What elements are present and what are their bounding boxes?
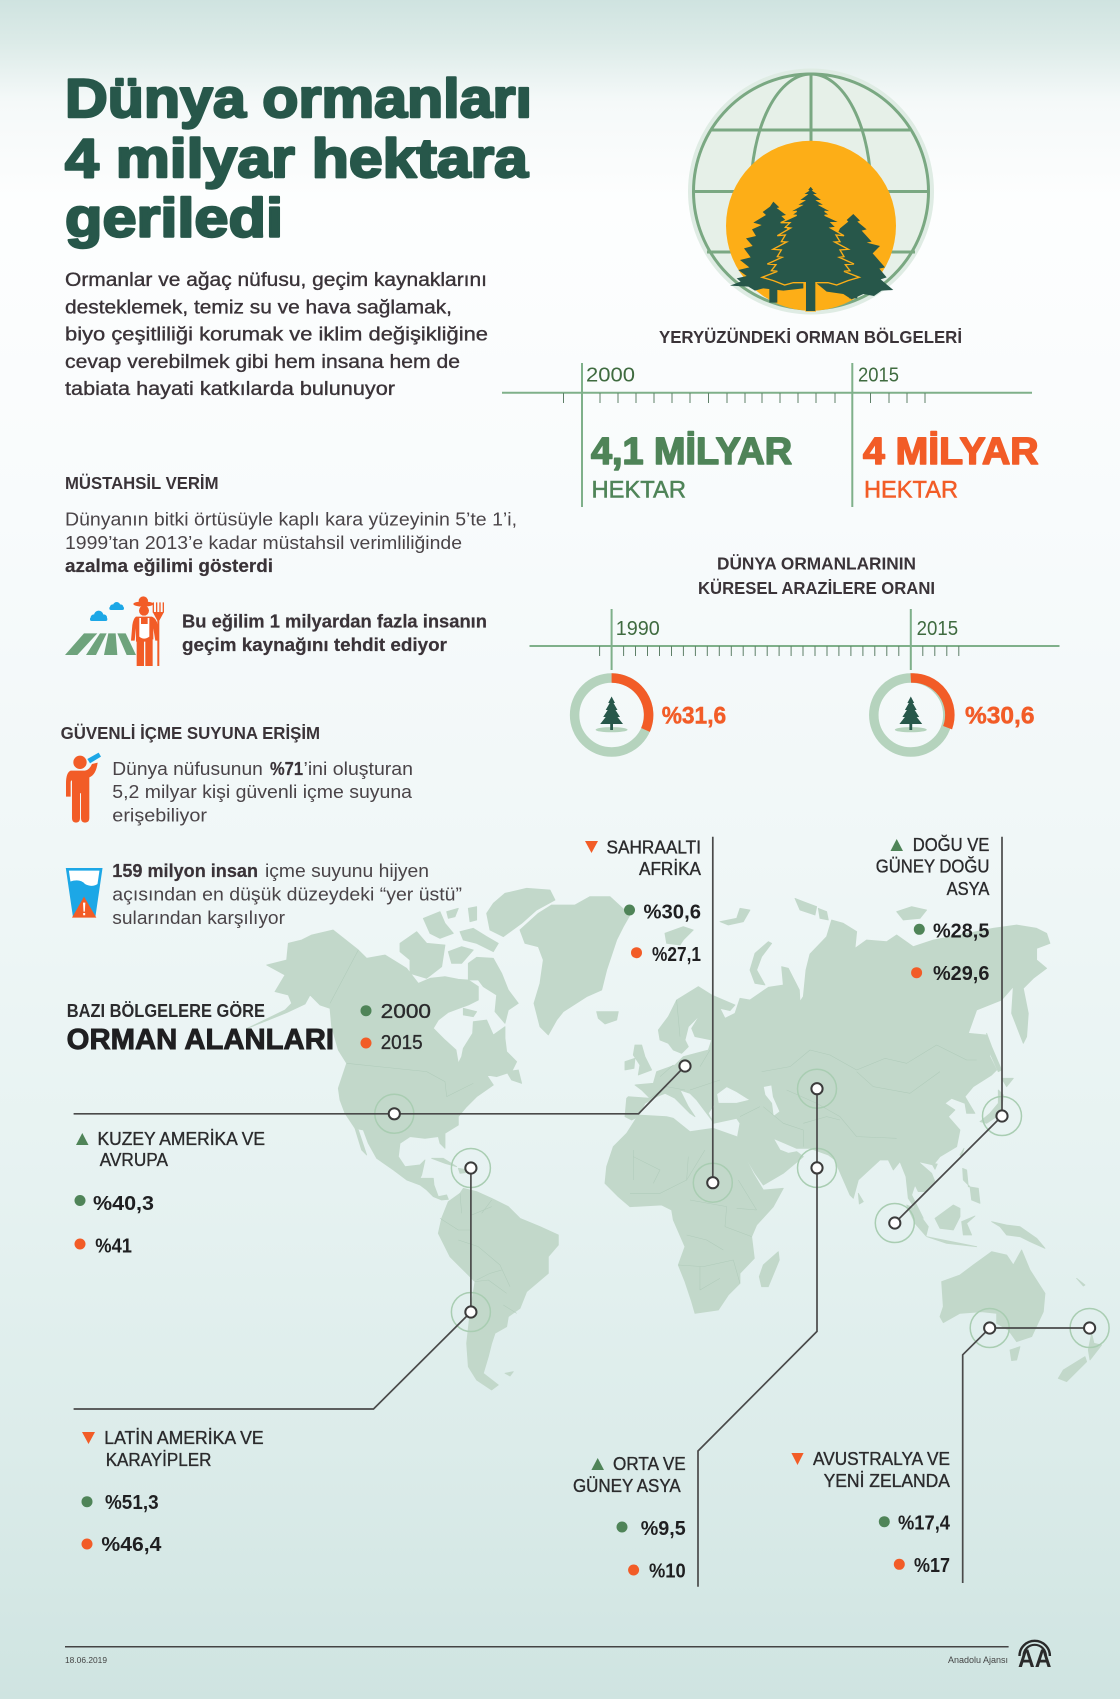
callout: threat to livelihoods: [182, 612, 487, 655]
region: Sub-Saharan Africa: AFRİKA: [639, 859, 701, 879]
intro paragraph: cevap verebilmek gibi hem insana hem de: [65, 352, 460, 373]
map heading: BAZI BÖLGELERE GÖRE: [67, 1001, 265, 1021]
region: Australia and New Zealand: AVUSTRALYA VE: [813, 1449, 950, 1469]
connector markers: [389, 1060, 1095, 1334]
stat: 2015 forest area: HEKTAR: [864, 477, 958, 504]
section: productive yield: Dünyanın bitki örtüsüyle kaplı kara yüzeyinin 5’te 1’i,: [65, 510, 517, 530]
region: East and Southeast Asia: %29,6: [933, 962, 989, 985]
region: Latin America and Caribbean: %46,4: [101, 1533, 162, 1556]
map heading: [67, 1001, 334, 1056]
eurasia: [625, 898, 1050, 1218]
timeline 2000-2015: 2015: [858, 364, 899, 387]
footer: Anadolu Ajansı: [948, 1655, 1008, 1665]
region: Sub-Saharan Africa: SAHRAALTI: [606, 837, 701, 857]
oceania and southeast asia: [858, 1148, 1102, 1382]
north america and greenland: [247, 888, 693, 1200]
text: 159 million people: sularından karşılıyor: [112, 908, 285, 928]
heading: forest share of land: DÜNYA ORMANLARININ: [717, 553, 916, 573]
region: Central and South Asia: %9,5: [641, 1517, 686, 1540]
timeline 1990-2015: 1990: [616, 617, 660, 640]
donut chart: 1990: %31,6: [662, 702, 726, 729]
region: North America and Europe: AVRUPA: [100, 1150, 168, 1170]
timeline 1990-2015: [530, 609, 1060, 670]
connector rings: [375, 1069, 1109, 1348]
region: North America and Europe: KUZEY AMERİKA VE: [98, 1129, 265, 1149]
text: 71 percent have access: erişebiliyor: [112, 806, 207, 826]
footer: 18.06.2019: [65, 1655, 107, 1665]
region: Central and South Asia: GÜNEY ASYA: [573, 1476, 681, 1496]
donut chart: 1990: [575, 678, 726, 752]
south america: [432, 1158, 558, 1390]
legend: [360, 1001, 431, 1054]
region: Latin America and Caribbean: LATİN AMERİKA VE: [104, 1428, 264, 1448]
intro paragraph: tabiata hayati katkılarda bulunuyor: [65, 379, 396, 400]
text: 71 percent have access: %71: [270, 759, 303, 779]
text: 159 million people: 159 milyon insan: [112, 861, 258, 881]
text: 71 percent have access: [112, 759, 413, 826]
heading: forest regions: YERYÜZÜNDEKİ ORMAN BÖLGELERİ: [659, 327, 962, 347]
section: productive yield: [65, 473, 517, 576]
stat: 2015 forest area: 4 MİLYAR: [863, 431, 1038, 473]
region: Sub-Saharan Africa: [585, 837, 701, 966]
icon: Anadolu Agency logo: AA: [1018, 1645, 1051, 1673]
timeline 2000-2015: [502, 363, 1032, 507]
region: Latin America and Caribbean: [82, 1428, 264, 1556]
timeline 2000-2015: 2000: [586, 364, 635, 387]
donut chart: 2015: [874, 678, 1034, 752]
stat: 2015 forest area: [863, 431, 1038, 504]
intro paragraph: biyo çeşitliliği korumak ve iklim değişikliğine: [65, 324, 488, 346]
region: Central and South Asia: [573, 1454, 686, 1582]
icon: farmer and field: [65, 596, 164, 666]
legend: 2015: [381, 1032, 423, 1054]
icon: glass with warning: [66, 868, 102, 918]
region: East and Southeast Asia: %28,5: [933, 919, 989, 942]
text: 159 million people: açısından en düşük düzeydeki “yer üstü”: [112, 885, 462, 905]
title: 4 milyar hektara: [65, 127, 528, 189]
title: geriledi: [65, 186, 283, 248]
world map: [247, 888, 1102, 1390]
icon: globe with trees: [688, 68, 934, 314]
intro paragraph: desteklemek, temiz su ve hava sağlamak,: [65, 298, 452, 318]
region: Central and South Asia: ORTA VE: [613, 1454, 686, 1474]
intro paragraph: [65, 270, 488, 400]
title: [65, 67, 532, 248]
region: East and Southeast Asia: [876, 834, 989, 985]
connector lines: [74, 837, 1090, 1587]
title: Dünya ormanları: [65, 67, 532, 129]
region: Australia and New Zealand: %17,4: [898, 1512, 951, 1535]
section: productive yield: 1999’tan 2013’e kadar müstahsil verimliliğinde: [65, 533, 462, 553]
text: 159 million people: [112, 861, 462, 928]
text: 71 percent have access: Dünya nüfusunun: [112, 759, 263, 779]
region: East and Southeast Asia: ASYA: [947, 879, 989, 899]
callout: threat to livelihoods: Bu eğilim 1 milyardan fazla insanın: [182, 612, 487, 632]
map heading: ORMAN ALANLARI: [67, 1024, 334, 1056]
footer: [65, 1647, 1009, 1665]
heading: forest share of land: [698, 553, 935, 598]
donut chart: 2015: %30,6: [965, 702, 1034, 729]
section heading: safe drinking water: GÜVENLİ İÇME SUYUNA ERİŞİM: [61, 723, 320, 743]
region: Central and South Asia: %10: [649, 1559, 686, 1582]
text: 71 percent have access: 5,2 milyar kişi güvenli içme suyuna: [112, 782, 413, 802]
region: Sub-Saharan Africa: %27,1: [652, 943, 701, 966]
region: East and Southeast Asia: DOĞU VE: [913, 834, 989, 855]
section: productive yield: MÜSTAHSİL VERİM: [65, 473, 218, 493]
region: Latin America and Caribbean: %51,3: [105, 1491, 159, 1514]
stat: 2000 forest area: 4,1 MİLYAR: [591, 431, 792, 473]
legend: 2000: [381, 1001, 431, 1023]
icon: person drinking: [66, 753, 101, 823]
africa: [605, 1115, 783, 1313]
region: Australia and New Zealand: %17: [914, 1554, 950, 1577]
text: 71 percent have access: ’ini oluşturan: [304, 759, 413, 779]
region: Australia and New Zealand: [791, 1449, 951, 1577]
timeline 1990-2015: 2015: [917, 617, 958, 640]
region: Sub-Saharan Africa: %30,6: [644, 900, 701, 923]
intro paragraph: Ormanlar ve ağaç nüfusu, geçim kaynaklarını: [65, 270, 487, 291]
stat: 2000 forest area: HEKTAR: [592, 477, 686, 504]
heading: forest share of land: KÜRESEL ARAZİLERE ORANI: [698, 578, 935, 598]
region: East and Southeast Asia: GÜNEY DOĞU: [876, 856, 989, 877]
text: 159 million people: içme suyunu hijyen: [265, 861, 429, 881]
callout: threat to livelihoods: geçim kaynağını tehdit ediyor: [182, 635, 447, 655]
region: North America and Europe: %40,3: [93, 1192, 154, 1215]
region: Australia and New Zealand: YENİ ZELANDA: [824, 1471, 950, 1491]
region: North America and Europe: %41: [95, 1234, 132, 1258]
region: North America and Europe: [74, 1129, 265, 1258]
region: Latin America and Caribbean: KARAYİPLER: [106, 1450, 211, 1470]
stat: 2000 forest area: [591, 431, 792, 504]
section: productive yield: azalma eğilimi gösterdi: [65, 556, 273, 576]
